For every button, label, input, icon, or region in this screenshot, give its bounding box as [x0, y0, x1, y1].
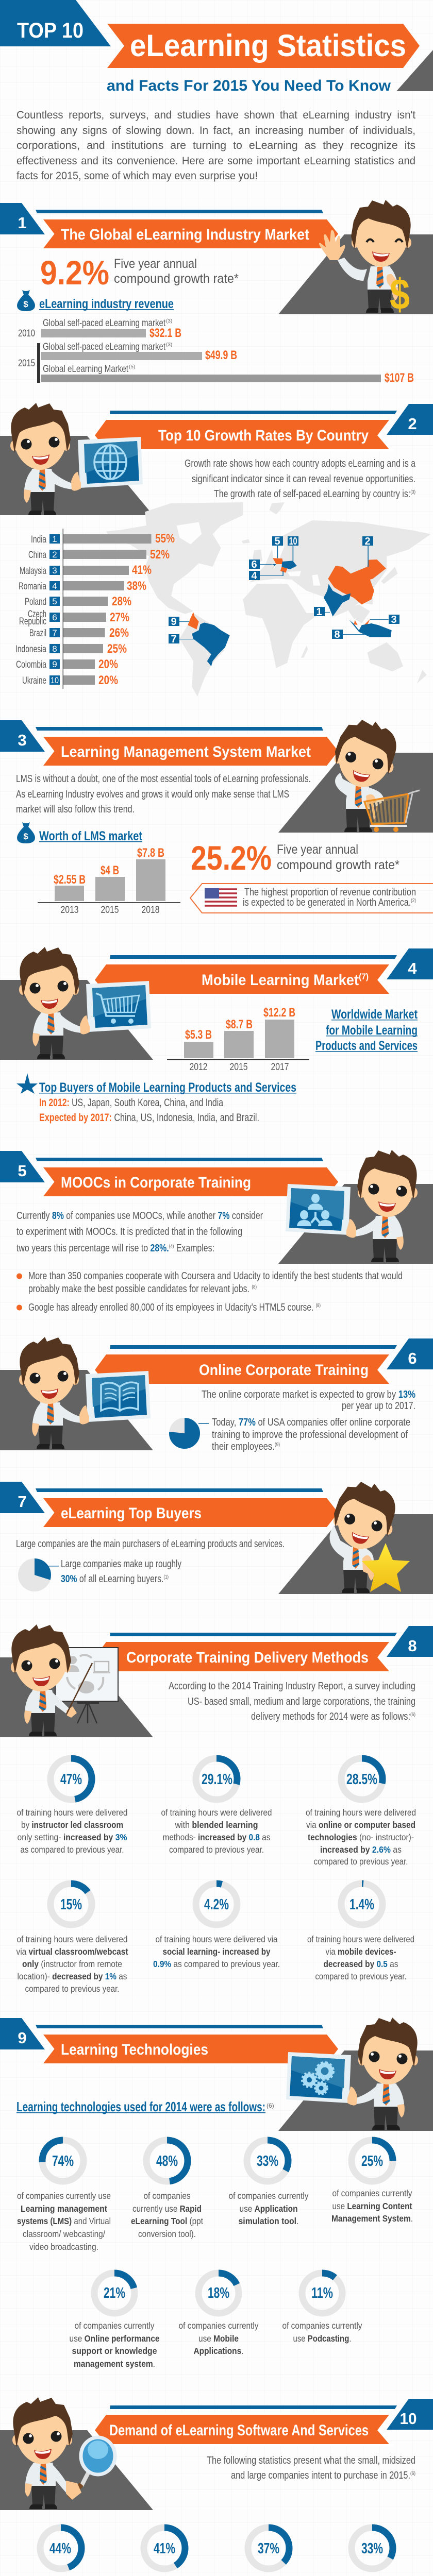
banner 5: 5: [18, 1162, 27, 1180]
lms bar chart: 2015: [101, 905, 119, 916]
stat: 47%: by instructor led classroom: [21, 1820, 123, 1830]
online corporate text: The online corporate market is expected to grow by 13%: [202, 1389, 415, 1400]
country bar chart: 52%: [150, 548, 170, 562]
moocs bullet list: [16, 1270, 403, 1313]
9.2% stat: 9.2%: [40, 253, 109, 292]
stat: 33%: 33%: [257, 2153, 278, 2170]
character waving with dollar sign: $: [390, 270, 410, 318]
lms bar chart: $4 B: [101, 863, 119, 877]
online corporate text: per year up to 2017.: [342, 1400, 415, 1412]
banner 10: 10: [400, 2410, 417, 2428]
character with star: [329, 1478, 410, 1593]
stat: 48%: eLearning Tool (ppt: [131, 2216, 203, 2226]
stat: 15%: only (instructor from remote: [22, 1959, 122, 1969]
banner 4: 4: [408, 959, 417, 977]
stat: 4.2%: 4.2%: [204, 1896, 229, 1913]
pie chart 77%: [169, 1418, 209, 1449]
character with tablet: [19, 947, 90, 1059]
stat: 48%: of companies: [143, 2191, 191, 2201]
tablet with cart: [86, 981, 151, 1032]
country bar chart: Poland: [25, 597, 46, 607]
stat: 21%: support or knowledge: [72, 2346, 157, 2356]
moocs text: to experiment with MOOCs. It is predicted that in the following: [16, 1226, 242, 1238]
top buyers: [16, 1073, 296, 1124]
banner 10: Demand of eLearning Software And Services: [109, 2422, 369, 2439]
stat: 4.2%: [153, 1884, 280, 1969]
stat: 47%: 47%: [60, 1771, 82, 1788]
mobile bar chart: $5.3 B: [185, 1028, 212, 1042]
character with tablet: [346, 1150, 418, 1262]
intro text: [185, 458, 416, 500]
stat: 18%: [178, 2273, 259, 2356]
stat: 11%: use Podcasting.: [293, 2333, 352, 2344]
lms text: [16, 773, 311, 815]
banner 5: [0, 1151, 338, 1196]
revenue bar chart: $49.9 B: [205, 348, 237, 362]
tablet with gears: [286, 2052, 351, 2103]
stat: 4.2%: of training hours were delivered via: [156, 1934, 278, 1944]
25.2% stat: compound growth rate*: [277, 858, 399, 872]
banner 4: [95, 948, 433, 994]
map number labels: 10: [289, 536, 297, 547]
stat: 29.1%: of training hours were delivered: [161, 1807, 272, 1818]
lms text: market will also follow this trend.: [16, 804, 135, 815]
country bar chart: 27%: [110, 611, 129, 624]
top buyers: Top Buyers of Mobile Learning Products and Services: [39, 1080, 296, 1095]
banner 10: [95, 2399, 433, 2444]
revenue bar chart: $107 B: [385, 371, 414, 385]
map number labels: 7: [171, 634, 177, 645]
stat: 28.5%: technologies (no- instructor)-: [308, 1832, 414, 1842]
stat: 18%: use Mobile: [198, 2333, 239, 2344]
stat: 25%: of companies currently: [332, 2188, 412, 2198]
mobile bar chart: 2015: [230, 1062, 247, 1073]
moocs text: Currently 8% of companies use MOOCs, while another 7% consider: [16, 1210, 263, 1222]
country bar chart: 3: [52, 566, 57, 575]
top 10 tab: TOP 10: [17, 18, 84, 42]
section 5: moocs in corporate training: [0, 1150, 433, 1313]
top buyers: Expected by 2017: China, US, Indonesia, India, and Brazil.: [39, 1112, 259, 1124]
country bar chart: 25%: [107, 642, 127, 656]
revenue bar chart: Global eLearning Market: [43, 364, 129, 375]
online corporate text: [202, 1389, 415, 1412]
moocs bullet list: (8): [316, 1303, 321, 1309]
character with tablet: [19, 1337, 89, 1449]
stat: 47%: of training hours were delivered: [16, 1807, 128, 1818]
intro paragraph: facts for 2015, some of which may even surprise you!: [16, 170, 258, 182]
section 10: demand of elearning software: [0, 2397, 433, 2576]
map number labels: 5: [274, 536, 280, 547]
mobile bar chart: [167, 1006, 309, 1073]
stat: 15%: [16, 1884, 128, 1994]
moocs bullet list: (8): [252, 1284, 257, 1290]
country bar chart: 55%: [155, 532, 175, 546]
country bar chart: Czech: [28, 609, 46, 620]
delivery intro text: [169, 1681, 415, 1722]
stat: 47%: [16, 1758, 128, 1855]
stat: 41%: 41%: [154, 2540, 175, 2557]
revenue heading with money bag: [17, 290, 174, 311]
stat: 15%: 15%: [60, 1896, 82, 1913]
banner 4: (7): [359, 972, 369, 981]
country bar chart: China: [28, 550, 46, 561]
section 1: global elearning market: [0, 200, 433, 385]
map number labels: 4: [251, 570, 257, 582]
banner 7: [0, 1482, 338, 1527]
stat: 15%: of training hours were delivered: [16, 1934, 128, 1944]
section 2: growth rates by country: [0, 403, 433, 697]
country bar chart: 6: [52, 613, 57, 622]
stat: 74%: Learning management: [21, 2204, 107, 2214]
learning technologies heading: (6): [267, 2102, 274, 2109]
moocs text: (4): [169, 1244, 174, 1249]
stat: 28.5%: of training hours were delivered: [306, 1807, 416, 1818]
country bar chart: Brazil: [29, 628, 46, 639]
stat: 74%: 74%: [52, 2153, 74, 2170]
banner 1: 1: [18, 214, 27, 232]
stat: 44%: [16, 2528, 103, 2576]
worth of lms heading: [17, 822, 143, 843]
stat: 21%: use Online performance: [69, 2333, 160, 2344]
country bar chart: Indonesia: [15, 644, 46, 655]
stat: 1.4%: [307, 1884, 414, 1981]
9.2% stat: [40, 253, 239, 292]
stat: 1.4%: of training hours were delivered: [307, 1934, 414, 1944]
header: [0, 0, 433, 94]
stat: 74%: of companies currently use: [17, 2191, 111, 2201]
stat: 33%: 33%: [361, 2540, 383, 2557]
banner 2: 2: [408, 415, 417, 433]
subtitle: and Facts For 2015 You Need To Know: [107, 77, 391, 94]
mobile bar chart: $8.7 B: [226, 1018, 253, 1031]
country bar chart: 20%: [98, 657, 118, 671]
mobile bar chart: $12.2 B: [263, 1006, 295, 1020]
large companies text: [61, 1558, 181, 1585]
revenue bar chart: Global self-paced eLearning market: [43, 342, 166, 352]
country bar chart: 8: [52, 644, 57, 654]
banner 3: 3: [18, 731, 27, 749]
stat: 25%: [331, 2140, 413, 2224]
stat: 1.4%: compared to previous year.: [315, 1971, 406, 1981]
25.2% stat: 25.2%: [191, 839, 272, 877]
lms bar chart: $2.55 B: [54, 873, 86, 887]
stat: 33%: use Application: [239, 2204, 298, 2214]
lms bar chart: 2013: [61, 905, 78, 916]
banner 9: [0, 2018, 338, 2063]
country bar chart: 20%: [98, 673, 118, 687]
section 4: mobile learning market: [0, 947, 433, 1124]
stat: 11%: [282, 2273, 362, 2344]
main title ribbon: eLearning Statistics: [130, 28, 406, 63]
usa companies text: (9): [275, 1442, 280, 1448]
stat: 48%: currently use Rapid: [132, 2204, 202, 2214]
moocs text: Examples:: [174, 1243, 214, 1254]
country bar chart: 1: [52, 534, 57, 544]
lms bar chart: $7.8 B: [137, 846, 164, 860]
tablet with people: [286, 1184, 351, 1235]
stat: 44%: 44%: [49, 2540, 71, 2557]
section 9: learning technologies: [0, 2018, 433, 2369]
9.2% stat: compound growth rate*: [114, 272, 239, 286]
large companies text: (1): [163, 1574, 169, 1580]
worth of lms heading: Worth of LMS market: [39, 829, 143, 843]
country bar chart: 5: [52, 597, 57, 606]
stat: 33%: [229, 2140, 309, 2226]
delivery intro text: (6): [410, 1712, 415, 1718]
stat: 37%: [230, 2528, 307, 2576]
stat: 28.5%: increased by 2.6% as: [320, 1844, 402, 1855]
country bar chart: Romania: [19, 581, 46, 592]
map number labels: 2: [364, 536, 371, 547]
stat: 21%: management system.: [74, 2359, 155, 2369]
banner 9: 9: [18, 2029, 27, 2047]
demand intro text: [207, 2455, 415, 2481]
country bar chart: 26%: [109, 626, 129, 640]
moocs bullet list: probably make the best possible candidates for relevant jobs.: [28, 1283, 308, 1295]
stat: 1.4%: via mobile devices-: [326, 1946, 396, 1957]
revenue heading with money bag: $: [23, 299, 28, 309]
whiteboard: [55, 1648, 118, 1723]
icon: star: [16, 1073, 38, 1094]
moocs text: two years this percentage will rise to 28%.: [16, 1243, 182, 1254]
stat: 47%: only setting- increased by 3%: [18, 1832, 127, 1842]
stat: 74%: video broadcasting.: [29, 2242, 98, 2252]
demand intro text: (6): [410, 2471, 415, 2477]
stat: 29.1%: [161, 1758, 272, 1855]
banner 8: Corporate Training Delivery Methods: [126, 1649, 369, 1666]
north america callout: (2): [411, 898, 416, 904]
stat: 15%: via virtual classroom/webcast: [16, 1946, 128, 1957]
banner 9: Learning Technologies: [61, 2041, 208, 2058]
country bar chart: 4: [52, 581, 57, 591]
banner 1: The Global eLearning Industry Market: [61, 226, 309, 243]
intro paragraph: Countless reports, surveys, and studies have shown that eLearning industry isn't: [16, 109, 415, 121]
decorative grey corner: [396, 50, 433, 91]
pie chart 30%: [18, 1558, 59, 1591]
character with shopping cart: [330, 716, 420, 832]
25.2% stat: Five year annual: [277, 842, 358, 857]
section 3: lms market: [0, 716, 433, 916]
stat: 4.2%: social learning- increased by: [163, 1946, 271, 1957]
stat: 29.1%: methods- increased by 0.8 as: [163, 1832, 271, 1842]
top 10 tab: [0, 0, 111, 46]
banner 5: MOOCs in Corporate Training: [61, 1174, 251, 1191]
stat: 28.5%: compared to previous year.: [313, 1856, 408, 1867]
stat: 33%: [333, 2528, 411, 2576]
stat: 18%: 18%: [208, 2285, 229, 2301]
9.2% stat: Five year annual: [114, 257, 197, 271]
section 6: online corporate training: [0, 1337, 433, 1452]
banner 7: 7: [18, 1493, 27, 1511]
intro paragraph: corporations, and institutions are turning to eLearning as they recognize its: [16, 140, 415, 151]
stat: 48%: conversion tool).: [138, 2229, 196, 2239]
revenue bar chart: (3): [166, 318, 172, 324]
usa companies text: [212, 1417, 410, 1452]
banner 2: [95, 404, 433, 449]
map number labels: 6: [251, 559, 257, 570]
banner 1: [0, 203, 338, 248]
banner 7: eLearning Top Buyers: [61, 1505, 202, 1522]
stat: 29.1%: compared to previous year.: [169, 1844, 264, 1855]
stat: 25%: 25%: [361, 2153, 383, 2170]
country bar chart: 28%: [112, 595, 131, 608]
country bar chart: 41%: [132, 563, 152, 577]
section 8: corporate training delivery methods: [0, 1624, 433, 1994]
section 7: elearning top buyers: [0, 1478, 433, 1594]
stat: 74%: systems (LMS) and Virtual: [17, 2216, 111, 2226]
tablet with book: [86, 1371, 151, 1422]
country bar chart: Ukraine: [22, 675, 46, 686]
banner 6: 6: [408, 1349, 417, 1367]
icon: us flag: [205, 888, 237, 908]
stat: 74%: [17, 2139, 111, 2252]
country bar chart: 9: [52, 659, 57, 669]
stat: 33%: of companies currently: [229, 2191, 309, 2201]
stat: 1.4%: decreased by 0.5 as: [324, 1959, 398, 1969]
large companies text: 30% of all eLearning buyers.: [61, 1573, 187, 1585]
character waving with dollar sign: [319, 200, 411, 318]
character with tablet: [10, 403, 81, 515]
country bar chart: 38%: [127, 579, 146, 593]
moocs text: [16, 1210, 263, 1254]
lms bar chart: [38, 846, 180, 916]
map number labels: 8: [334, 629, 340, 640]
banner 3: Learning Management System Market: [61, 743, 311, 760]
country bar chart: 2: [52, 550, 57, 560]
moocs bullet list: Google has already enrolled 80,000 of its employees in Udacity's HTML5 course.: [28, 1302, 397, 1313]
country bar chart: 7: [52, 628, 57, 638]
worth of lms heading: $: [23, 832, 28, 841]
stat: 29.1%: 29.1%: [202, 1771, 232, 1788]
character with pointer: [11, 1624, 92, 1736]
stat: 21%: [69, 2273, 160, 2369]
country bar chart: India: [31, 534, 46, 545]
stat: 11%: 11%: [311, 2285, 333, 2301]
country bar chart: Colombia: [16, 659, 46, 670]
stat: 25%: use Learning Content: [332, 2201, 412, 2211]
25.2% stat: [191, 839, 399, 877]
revenue bar chart: (3): [166, 342, 172, 348]
stat: 29.1%: with blended learning: [175, 1820, 258, 1830]
banner 6: [95, 1338, 433, 1384]
banner 6: Online Corporate Training: [199, 1362, 369, 1379]
north america callout: [190, 884, 433, 913]
stat: 4.2%: 0.9% as compared to previous year.: [153, 1959, 280, 1969]
learning technologies heading: Learning technologies used for 2014 were as follows:: [16, 2099, 265, 2114]
lms text: As eLearning Industry evolves and grows it would only make sense that LMS: [16, 789, 289, 800]
stat: 21%: of companies currently: [74, 2320, 155, 2331]
revenue bar chart: [18, 318, 414, 385]
usa companies text: their employees.: [212, 1441, 288, 1452]
stat: 18%: Applications.: [194, 2346, 243, 2356]
revenue heading with money bag: eLearning industry revenue: [39, 297, 174, 311]
stat: 41%: [125, 2528, 204, 2576]
map number labels: 3: [391, 614, 397, 625]
intro text: (3): [410, 489, 415, 495]
banner 4: Mobile Learning Market: [202, 972, 374, 989]
country bar chart: [15, 529, 175, 689]
stat: 33%: simulation tool.: [238, 2216, 299, 2226]
stat: 37%: 37%: [258, 2540, 279, 2557]
revenue bar chart: 2010: [18, 328, 35, 339]
world map: [106, 502, 431, 697]
stat: 28.5%: 28.5%: [346, 1771, 377, 1788]
stat: 74%: classroom/ webcasting/: [23, 2229, 105, 2239]
top buyers text: Large companies are the main purchasers of eLearning products and services.: [16, 1538, 285, 1550]
banner 8: 8: [408, 1637, 417, 1655]
revenue bar chart: $32.1 B: [149, 326, 181, 340]
revenue bar chart: (5): [129, 364, 135, 370]
stat: 15%: compared to previous year.: [25, 1984, 120, 1994]
large companies text: Large companies make up roughly: [61, 1558, 181, 1570]
stat: 18%: of companies currently: [178, 2320, 259, 2331]
banner 3: [0, 720, 338, 766]
banner 8: [95, 1626, 433, 1671]
stat: 48%: 48%: [156, 2153, 178, 2170]
intro paragraph: [16, 109, 415, 182]
character with tablet: [347, 2018, 418, 2130]
map number labels: [169, 536, 399, 645]
lms bar chart: 2018: [141, 905, 160, 916]
intro paragraph: showing any signs of slowing down. In fact, an increasing number of individuals,: [16, 125, 415, 137]
character with magnifier: [12, 2397, 115, 2509]
revenue bar chart: 2015: [18, 358, 35, 369]
country bar chart: Malaysia: [20, 566, 46, 577]
revenue bar chart: Global self-paced eLearning market: [43, 318, 166, 329]
tablet with globe: [78, 437, 143, 488]
mobile bar chart: 2017: [271, 1062, 289, 1073]
stat: 1.4%: 1.4%: [349, 1896, 374, 1913]
stat: 47%: as compared to previous year.: [21, 1844, 124, 1855]
stat: 25%: Management System.: [331, 2213, 413, 2224]
stat: 15%: location)- decreased by 1% as: [18, 1971, 127, 1981]
stat: 28.5%: via online or computer based: [306, 1820, 415, 1830]
country bar chart: Republic: [19, 616, 46, 627]
map number labels: 1: [316, 606, 322, 618]
stat: 28.5%: [306, 1758, 416, 1867]
stat: 48%: [131, 2140, 203, 2239]
top buyers: In 2012: US, Japan, South Korea, China, and India: [39, 1097, 223, 1109]
map number labels: 9: [171, 616, 177, 628]
intro paragraph: effectiveness and its convenience. Here are some important eLearning statistics and: [16, 155, 415, 167]
country bar chart: 10: [51, 675, 59, 685]
stat: 11%: of companies currently: [282, 2320, 362, 2331]
lms text: LMS is without a doubt, one of the most essential tools of eLearning professionals.: [16, 773, 311, 785]
mobile bar chart: 2012: [190, 1062, 207, 1073]
banner 2: Top 10 Growth Rates By Country: [158, 427, 369, 444]
worldwide market heading: [315, 1007, 418, 1053]
stat: 21%: 21%: [104, 2285, 125, 2301]
